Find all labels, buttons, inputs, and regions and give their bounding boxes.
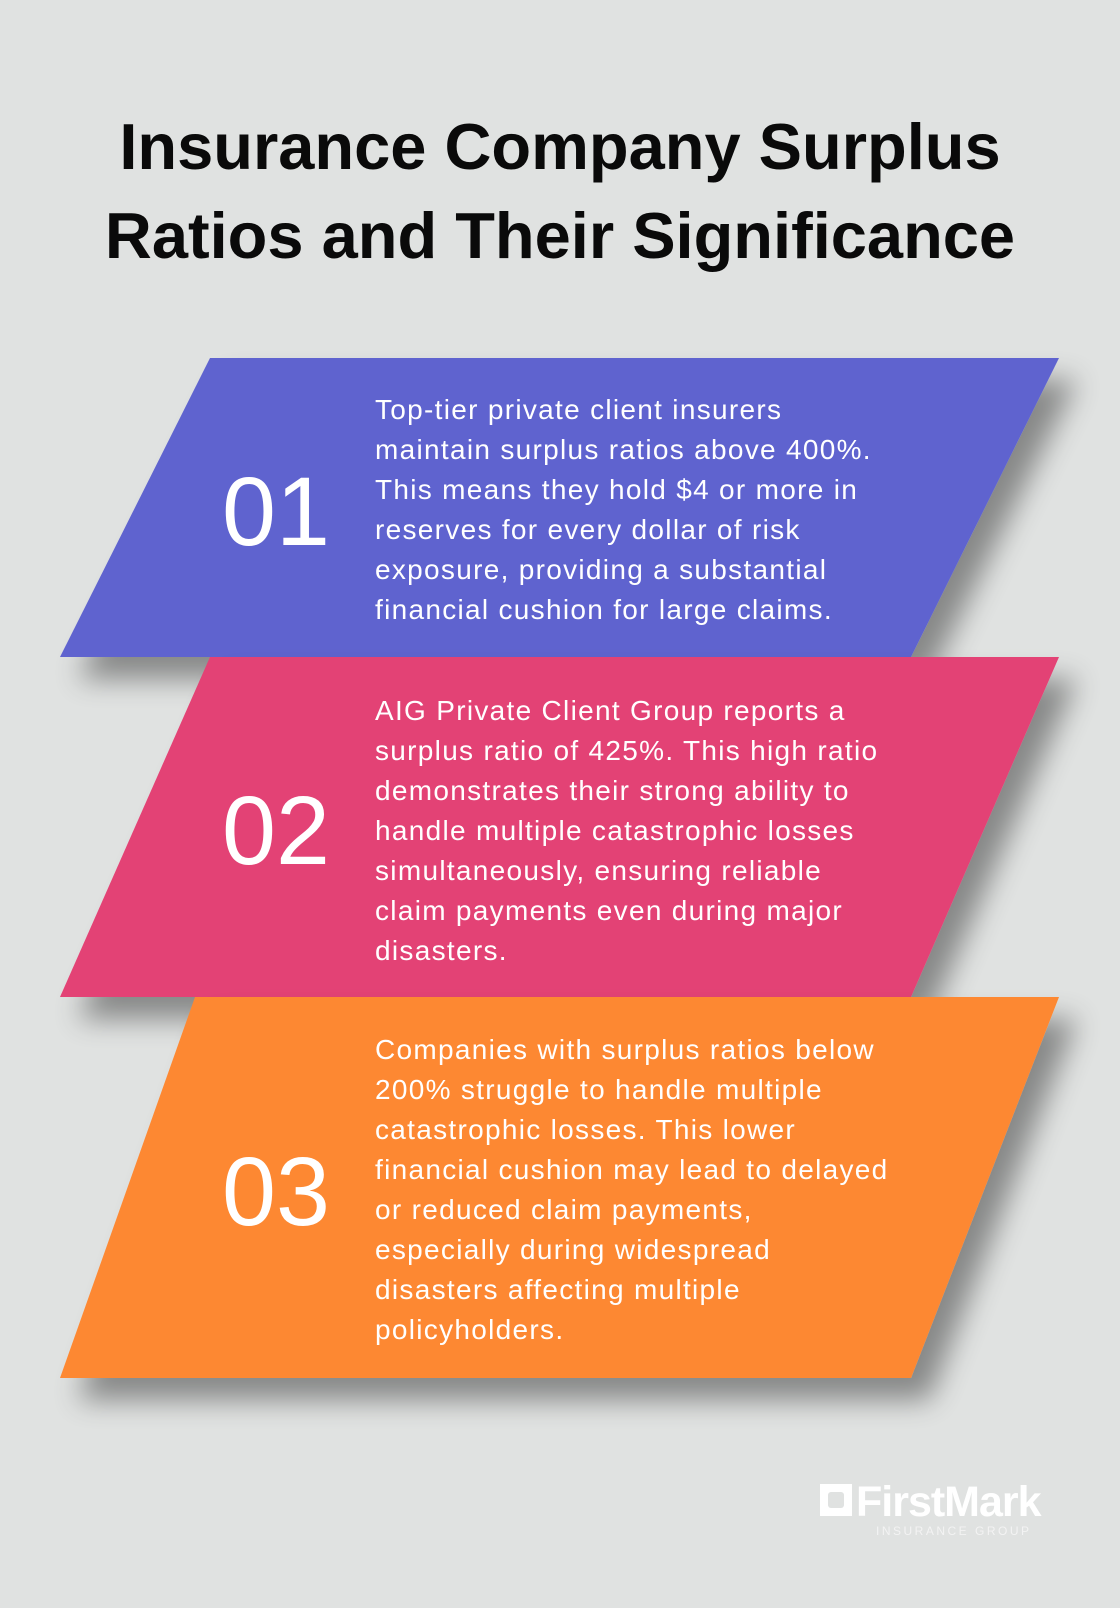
text block 03: catastrophic losses. This lower [375, 1114, 796, 1145]
text block 02: AIG Private Client Group reports a [375, 695, 846, 726]
number 02: 02 [222, 776, 330, 885]
text block 02: demonstrates their strong ability to [375, 775, 850, 806]
title: Insurance Company Surplus [119, 110, 1001, 183]
logo: FirstMark [820, 1478, 1042, 1538]
text block 03: especially during widespread [375, 1234, 771, 1265]
text block 01: financial cushion for large claims. [375, 594, 833, 625]
text block 02: claim payments even during major [375, 895, 843, 926]
text block 03: 200% struggle to handle multiple [375, 1074, 823, 1105]
logo: FirstMark: INSURANCE GROUP [876, 1524, 1032, 1538]
panel: 01 blue [60, 358, 1059, 657]
text block 02: disasters. [375, 935, 508, 966]
text block 01 [375, 394, 872, 625]
text block 03: disasters affecting multiple [375, 1274, 741, 1305]
text block 03: policyholders. [375, 1314, 564, 1345]
title: Ratios and Their Significance [105, 199, 1015, 272]
text block 03: Companies with surplus ratios below [375, 1034, 875, 1065]
title [105, 110, 1015, 272]
text block 03 [375, 1034, 889, 1345]
text block 02 [375, 695, 878, 966]
text block 03: financial cushion may lead to delayed [375, 1154, 889, 1185]
text block 01: maintain surplus ratios above 400%. [375, 434, 872, 465]
panel: 02 pink [60, 657, 1059, 997]
text block 03: or reduced claim payments, [375, 1194, 753, 1225]
text block 01: This means they hold $4 or more in [375, 474, 858, 505]
number 01: 01 [222, 457, 330, 566]
number 03: 03 [222, 1137, 330, 1246]
text block 01: Top-tier private client insurers [375, 394, 782, 425]
text block 02: simultaneously, ensuring reliable [375, 855, 822, 886]
text block 02: handle multiple catastrophic losses [375, 815, 855, 846]
panel: 03 orange [60, 997, 1059, 1378]
text block 02: surplus ratio of 425%. This high ratio [375, 735, 878, 766]
logo: FirstMark: FirstMark [856, 1478, 1042, 1526]
icon: square [820, 1484, 852, 1516]
text block 01: exposure, providing a substantial [375, 554, 827, 585]
text block 01: reserves for every dollar of risk [375, 514, 801, 545]
